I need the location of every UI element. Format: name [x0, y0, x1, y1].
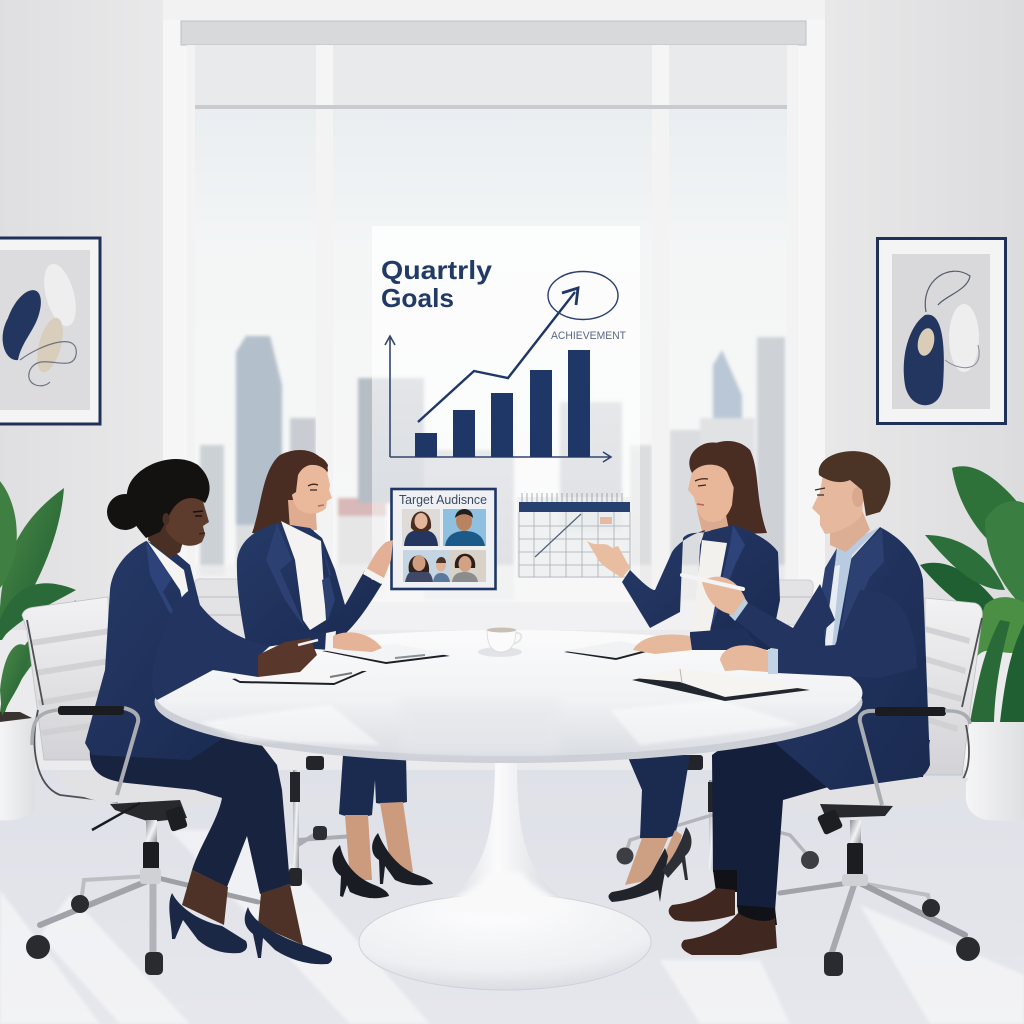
trousers — [627, 755, 690, 839]
hand — [720, 645, 768, 672]
column — [850, 820, 861, 846]
jacket — [85, 541, 250, 760]
casters — [824, 899, 980, 976]
back chair left base — [289, 756, 368, 886]
wall art right — [878, 238, 1006, 424]
back wall left — [0, 0, 165, 780]
shirt — [281, 521, 326, 630]
trousers — [90, 730, 290, 894]
bun — [107, 494, 143, 530]
back chair right — [616, 580, 819, 870]
sleeve — [733, 584, 835, 652]
armrest — [32, 710, 58, 745]
legs — [345, 802, 413, 880]
mechanism — [110, 800, 187, 822]
t-shirt — [825, 565, 840, 648]
person: woman three, lower body — [608, 755, 692, 902]
hand — [633, 635, 692, 654]
calendar — [517, 493, 631, 578]
shoe — [372, 833, 433, 885]
shirt — [147, 541, 198, 640]
pen — [298, 640, 318, 645]
leg — [625, 830, 682, 885]
cuff — [363, 568, 384, 584]
board title: Quartrly — [381, 255, 493, 285]
person: woman one, body — [85, 459, 332, 964]
clipboard left back — [322, 644, 450, 664]
board title — [381, 255, 493, 313]
casters — [26, 895, 163, 975]
window view: sky and city skyline — [195, 109, 787, 606]
audience photo 1 — [402, 509, 440, 546]
hair — [126, 459, 210, 538]
eye and brow — [815, 488, 825, 495]
arm: woman one, hand on table — [152, 590, 318, 700]
hair back — [252, 450, 328, 540]
pen — [682, 575, 743, 589]
hair back — [692, 441, 767, 535]
arm: man, hand on table — [720, 590, 917, 678]
neck — [288, 500, 317, 530]
left chair armrest — [58, 706, 138, 795]
left front chair — [22, 597, 258, 975]
cuff — [325, 631, 336, 650]
glass presentation board — [372, 226, 640, 602]
sleeve — [777, 590, 917, 678]
socks — [713, 870, 777, 925]
audience photo 2 — [443, 509, 486, 546]
back wall right — [825, 0, 1024, 780]
shoe — [608, 848, 668, 902]
pot left — [0, 718, 35, 820]
hair front — [689, 442, 745, 495]
person: woman three, torso and head — [587, 441, 780, 650]
shoe — [169, 893, 247, 953]
sleeve — [690, 628, 760, 650]
lapel — [146, 542, 190, 642]
window sill — [163, 605, 825, 631]
star base — [40, 876, 258, 952]
star base — [780, 882, 965, 952]
hair front — [284, 455, 328, 496]
shoe — [662, 827, 692, 880]
window mullions — [187, 45, 798, 606]
sleeve — [280, 630, 330, 650]
backrest — [925, 598, 982, 775]
jacket — [622, 525, 780, 650]
hair — [819, 451, 890, 516]
face — [688, 464, 735, 522]
cuff — [729, 597, 748, 621]
board title: Goals — [381, 283, 454, 313]
lower wall — [0, 630, 1024, 772]
audience photo 3 — [403, 550, 486, 582]
sheer blind — [188, 45, 798, 109]
person: woman two, lower body — [333, 755, 433, 898]
eye — [193, 511, 203, 516]
jacket — [237, 523, 382, 650]
lapel — [838, 528, 884, 648]
hand — [333, 632, 382, 652]
ear — [162, 513, 170, 525]
table top — [154, 630, 862, 763]
trousers — [712, 720, 930, 911]
floor light streaks — [0, 830, 1024, 1024]
eye and brow — [695, 479, 708, 486]
shoe — [245, 907, 332, 964]
shoe — [669, 888, 735, 922]
clipboard left front — [232, 668, 367, 685]
right front chair — [780, 598, 982, 976]
lapel — [266, 523, 305, 628]
bar chart with trend arrow — [385, 272, 626, 462]
wall art left — [0, 238, 100, 424]
arm: woman two, hand on table — [280, 630, 382, 652]
leg lower — [182, 870, 303, 945]
lapel — [710, 525, 745, 630]
bar chart with trend arrow: ACHIEVEMENT — [551, 330, 626, 342]
seat — [785, 778, 968, 810]
ear — [852, 487, 864, 507]
lips — [697, 504, 704, 505]
shoe — [681, 913, 777, 955]
right chair armrest — [860, 707, 970, 805]
back chair right base — [616, 755, 819, 870]
jacket — [760, 527, 930, 790]
shirt collar — [825, 527, 880, 650]
target audience card — [392, 489, 496, 589]
neck — [697, 510, 730, 540]
arm: woman three, hand on table — [633, 628, 760, 654]
ceiling strip — [163, 0, 825, 20]
coffee cup — [478, 628, 522, 657]
person: woman two, torso and head — [237, 450, 393, 650]
person: man, body — [669, 451, 930, 955]
neck — [148, 520, 188, 558]
cuff — [768, 649, 778, 674]
clipboard right back — [564, 641, 654, 660]
raised hand — [587, 541, 630, 578]
lips — [318, 505, 324, 506]
table base — [359, 894, 651, 990]
face — [291, 465, 332, 514]
hand — [702, 577, 745, 615]
roller blind — [181, 21, 806, 45]
trousers — [339, 755, 407, 817]
arm: man, raised hand with pen — [682, 575, 835, 652]
table reflection — [200, 700, 800, 745]
plant right — [920, 466, 1024, 822]
column — [146, 820, 157, 844]
mechanism — [820, 804, 893, 818]
backrest — [22, 597, 112, 760]
neck — [830, 510, 870, 552]
table stem — [438, 755, 572, 905]
eye and brow — [308, 484, 318, 490]
lips — [199, 533, 205, 534]
seat — [55, 772, 223, 806]
back chair left — [195, 579, 368, 886]
chrome frame — [925, 618, 982, 799]
raised hand — [366, 540, 393, 580]
stem blend — [430, 872, 580, 916]
head — [165, 484, 209, 546]
window surround — [163, 20, 825, 632]
face — [812, 468, 865, 534]
floor — [0, 770, 1024, 1024]
hand — [258, 638, 317, 677]
shoe — [333, 845, 389, 898]
shirt — [692, 540, 727, 632]
sleeve — [152, 590, 270, 700]
pot right — [965, 716, 1024, 822]
open notebook — [632, 668, 810, 701]
target audience card: Target Audisnce — [399, 493, 487, 507]
plant left — [0, 475, 76, 820]
chrome frame — [27, 620, 118, 802]
